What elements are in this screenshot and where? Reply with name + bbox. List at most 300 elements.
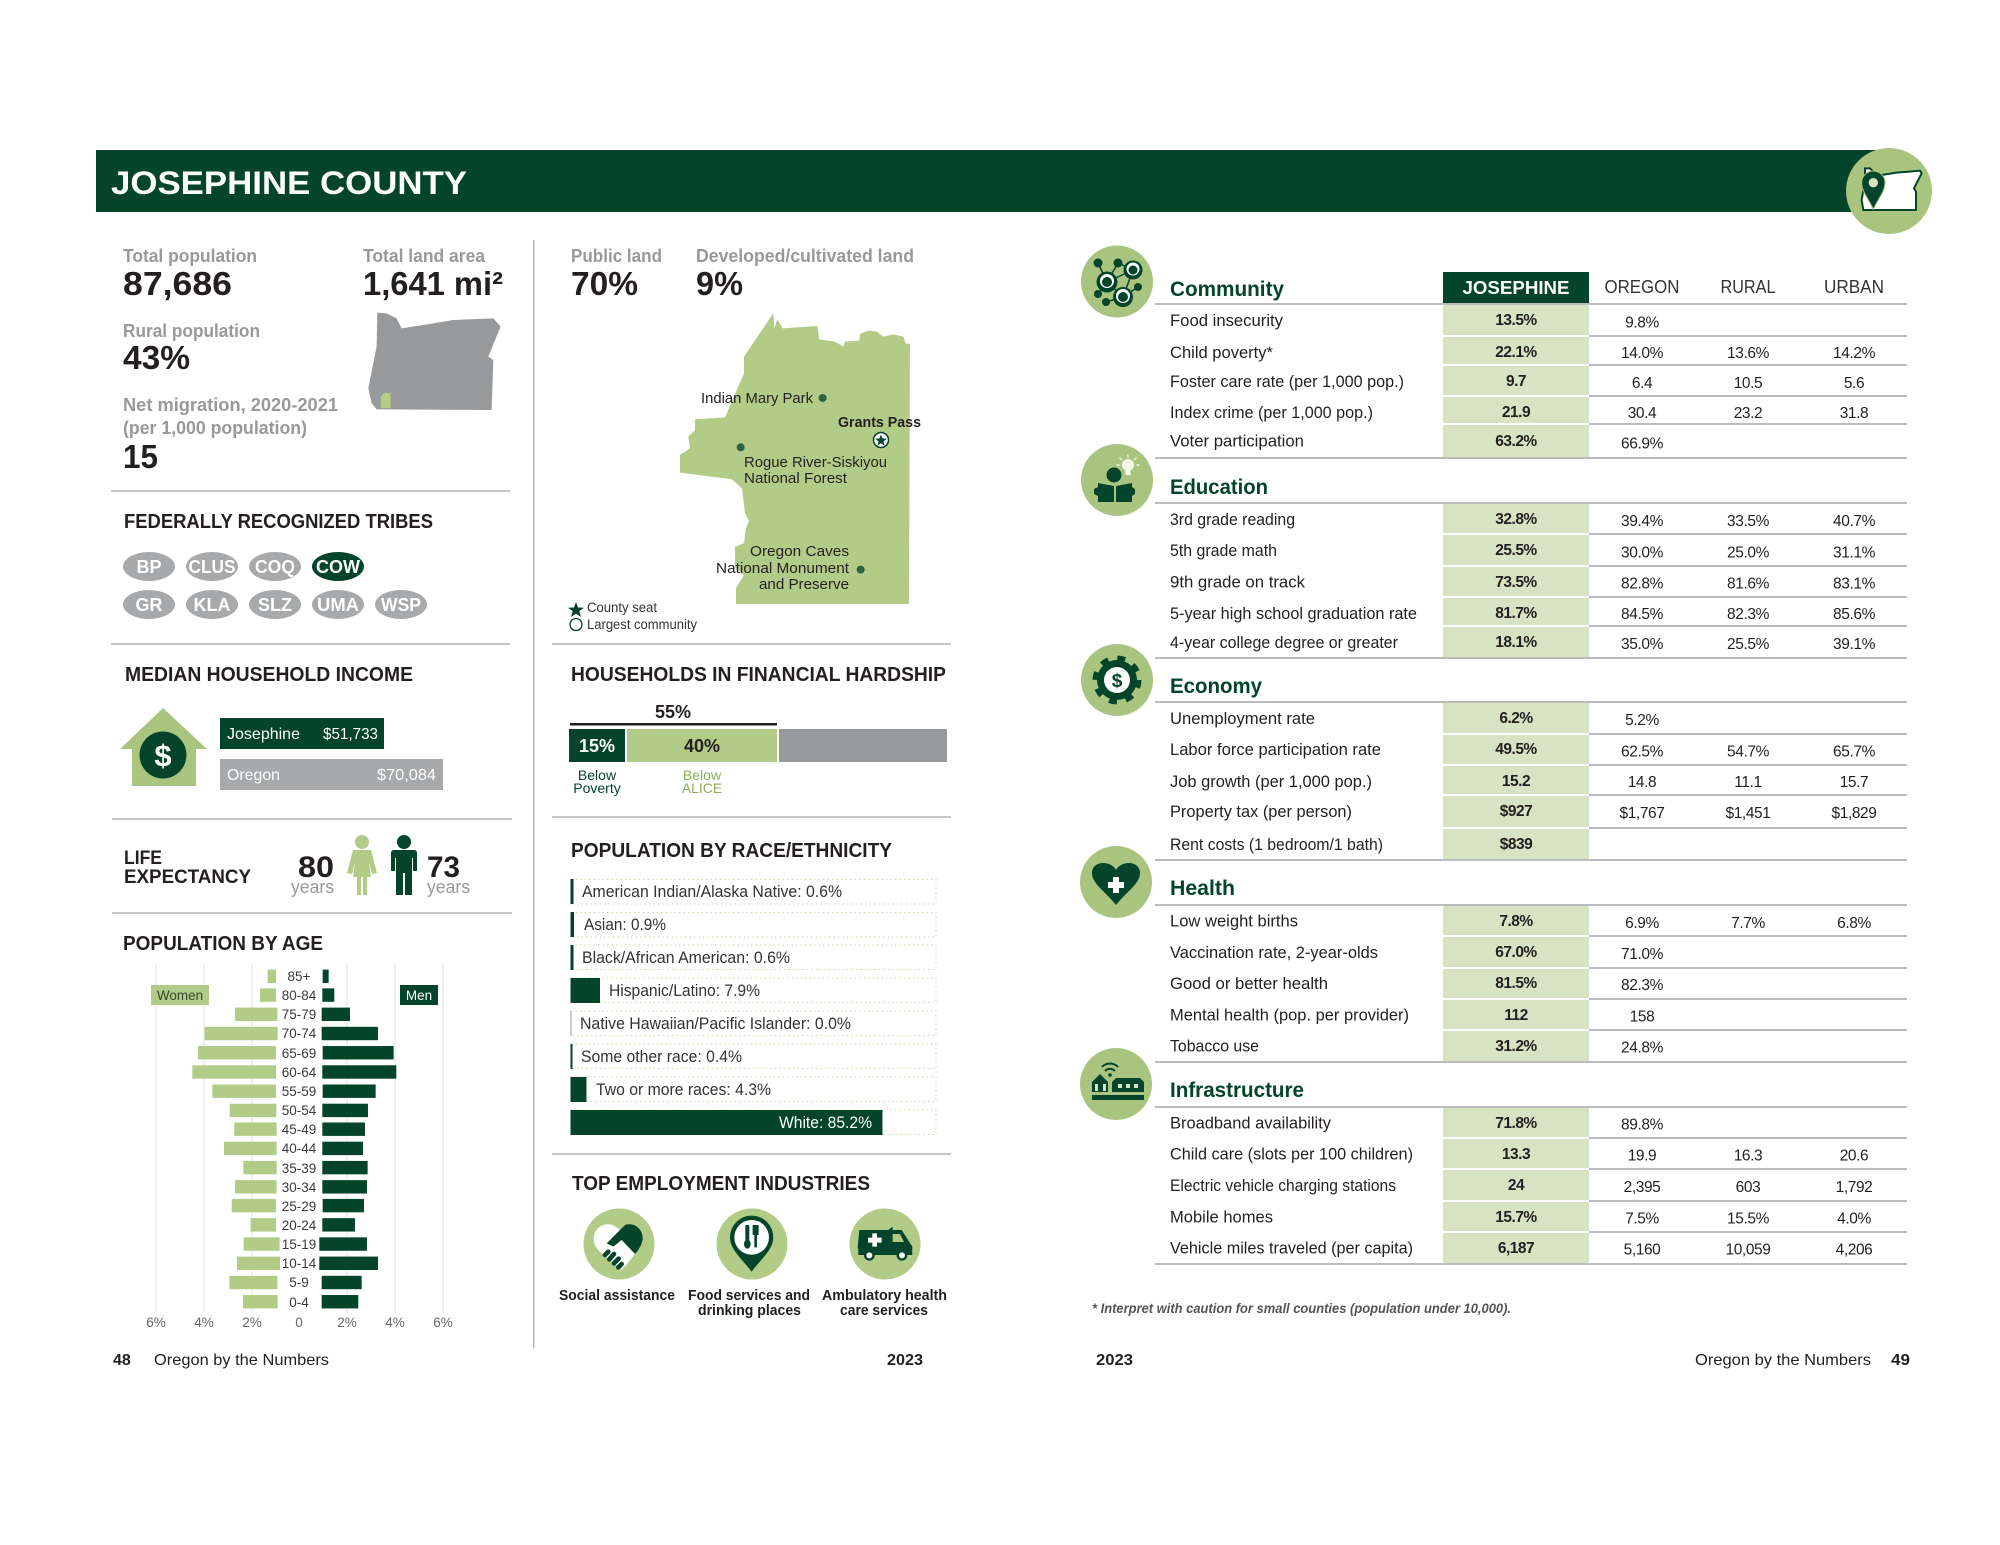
segment: below ALICE: ALICE bbox=[682, 780, 722, 796]
row: Unemployment rate: Unemployment rate bbox=[1170, 710, 1315, 728]
panel: median household income: MEDIAN HOUSEHOLD INCOME bbox=[125, 664, 413, 686]
row: Vehicle miles traveled: Vehicle miles traveled (per capita) bbox=[1170, 1240, 1413, 1258]
row: Asian bbox=[570, 912, 666, 937]
row: Good or better health: 81.5% bbox=[1495, 975, 1537, 992]
row: 9th grade on track bbox=[1170, 574, 1876, 592]
row: 5th grade math: 25.0% bbox=[1727, 544, 1770, 562]
row: White: White: 85.2% bbox=[779, 1113, 872, 1132]
row: Mobile homes: 15.5% bbox=[1727, 1210, 1770, 1228]
row: Index crime: 31.8 bbox=[1840, 405, 1868, 422]
icon: community network bbox=[1081, 246, 1153, 318]
row: Property tax bbox=[1170, 803, 1877, 822]
age group labels bbox=[282, 969, 317, 1310]
row: college degree: 35.0% bbox=[1621, 636, 1664, 653]
panel: life expectancy bbox=[124, 835, 470, 897]
row: Child poverty: 13.6% bbox=[1727, 345, 1770, 362]
footer: left page: 2023 bbox=[887, 1352, 923, 1369]
row: Vehicle miles traveled: 5,160 bbox=[1624, 1242, 1661, 1258]
row: EV charging stations: 24 bbox=[1508, 1177, 1525, 1194]
men life expectancy bbox=[427, 851, 470, 897]
stat: rural population bbox=[123, 321, 260, 376]
row: Job growth: 15.2 bbox=[1502, 773, 1530, 790]
section: Health bbox=[1080, 846, 1871, 1056]
footnote: * Interpret with caution for small counties (population under 10,000). bbox=[1092, 1300, 1511, 1316]
row: Mental health: 158 bbox=[1630, 1008, 1654, 1026]
row: Vaccination rate: 71.0% bbox=[1621, 946, 1664, 963]
map legend: County seat bbox=[587, 600, 657, 615]
page divider bbox=[533, 240, 534, 1348]
bar: Josephine income: $51,733 bbox=[323, 726, 378, 743]
row: Labor force participation: 62.5% bbox=[1621, 744, 1664, 760]
table header row bbox=[1443, 272, 1884, 303]
label: Rogue River-Siskiyou National Forest bbox=[744, 454, 887, 487]
row: White bbox=[570, 1110, 882, 1135]
age group labels: 10-14 bbox=[282, 1256, 317, 1271]
bar: Oregon income: Oregon bbox=[227, 767, 280, 784]
row: Mobile homes: 15.7% bbox=[1495, 1209, 1537, 1226]
heading: Community bbox=[1170, 278, 1284, 301]
row: 5th grade math bbox=[1170, 542, 1876, 562]
footer: left page: Oregon by the Numbers bbox=[154, 1352, 329, 1369]
segment: below poverty: 15% bbox=[579, 736, 615, 756]
row: Index crime: 21.9 bbox=[1502, 404, 1531, 421]
age group labels: 50-54 bbox=[282, 1103, 317, 1118]
row: Broadband availability bbox=[1170, 1114, 1664, 1134]
label: Indian Mary Park: Indian Mary Park bbox=[701, 390, 813, 407]
x axis labels: 4% bbox=[194, 1315, 214, 1330]
label: ambulatory health: care services bbox=[840, 1302, 928, 1319]
heading: Economy bbox=[1170, 675, 1262, 698]
row: Child care: 20.6 bbox=[1840, 1148, 1868, 1164]
row: Job growth: 11.1 bbox=[1734, 774, 1762, 791]
bar: Oregon income: $70,084 bbox=[377, 767, 436, 784]
label: Rogue River-Siskiyou National Forest: Rogue River-Siskiyou bbox=[744, 454, 887, 471]
row: Hispanic/Latino: Hispanic/Latino: 7.9% bbox=[609, 981, 760, 1000]
tribe badges: UMA bbox=[317, 595, 359, 615]
table header row: URBAN bbox=[1824, 277, 1884, 297]
row: 3rd grade reading: 39.4% bbox=[1621, 513, 1664, 530]
row: Tobacco use: 31.2% bbox=[1495, 1038, 1537, 1055]
row: Property tax: $927 bbox=[1500, 803, 1532, 820]
row: Property tax: $1,767 bbox=[1619, 805, 1665, 822]
stat: developed land: 9% bbox=[696, 265, 743, 302]
row: Labor force participation bbox=[1170, 741, 1876, 760]
stat: net migration: (per 1,000 population) bbox=[123, 418, 307, 438]
row: Native Hawaiian/Pacific Islander: Native Hawaiian/Pacific Islander: 0.0% bbox=[580, 1014, 851, 1033]
row: high school graduation: 85.6% bbox=[1833, 606, 1876, 623]
age group labels: 75-79 bbox=[282, 1007, 316, 1022]
stat: public land: Public land bbox=[571, 246, 662, 266]
row: Good or better health bbox=[1170, 975, 1664, 994]
row: Vaccination rate bbox=[1170, 944, 1664, 963]
title: JOSEPHINE COUNTY bbox=[111, 165, 467, 201]
segment: below ALICE: 40% bbox=[684, 736, 720, 756]
age group labels: 0-4 bbox=[289, 1295, 309, 1310]
row: college degree: 18.1% bbox=[1495, 634, 1537, 651]
row: Foster care rate: 10.5 bbox=[1734, 375, 1762, 392]
row: Vehicle miles traveled: 4,206 bbox=[1836, 1242, 1872, 1258]
row: Voter participation bbox=[1170, 432, 1664, 452]
row: college degree: 25.5% bbox=[1727, 636, 1770, 653]
segment: below poverty bbox=[569, 729, 625, 796]
row: Foster care rate: Foster care rate (per 1,000 pop.) bbox=[1170, 373, 1404, 391]
bars: men bbox=[319, 970, 396, 1308]
tribe badges: GR bbox=[136, 595, 163, 615]
stat: total population: 87,686 bbox=[123, 265, 232, 302]
section: Education bbox=[1081, 444, 1876, 653]
men life expectancy: 73 bbox=[427, 851, 460, 884]
heading: Infrastructure bbox=[1170, 1079, 1304, 1102]
label: Rogue River-Siskiyou National Forest: National Forest bbox=[744, 470, 848, 487]
header banner bbox=[96, 148, 1932, 234]
footer: right page bbox=[1096, 1352, 1910, 1369]
row: 9th grade on track: 83.1% bbox=[1833, 576, 1876, 592]
row: Asian: Asian: 0.9% bbox=[584, 915, 666, 934]
bracket: 55%: 55% bbox=[655, 702, 691, 722]
row: Child poverty: 14.2% bbox=[1833, 345, 1876, 362]
row: Vehicle miles traveled bbox=[1170, 1240, 1872, 1258]
panel: population by race/ethnicity bbox=[570, 840, 936, 1135]
row: Tobacco use bbox=[1170, 1038, 1664, 1056]
footer: left page: 48 bbox=[113, 1352, 131, 1369]
label: social assistance: Social assistance bbox=[559, 1287, 675, 1304]
row: EV charging stations bbox=[1170, 1177, 1872, 1196]
row: 5th grade math: 25.5% bbox=[1495, 542, 1537, 559]
row: Job growth bbox=[1170, 773, 1868, 791]
row: Child care: 16.3 bbox=[1734, 1148, 1762, 1164]
row: Voter participation: 66.9% bbox=[1621, 436, 1664, 452]
row: Child poverty: Child poverty* bbox=[1170, 344, 1274, 362]
label: Oregon Caves National Monument and Preserve: Oregon Caves bbox=[750, 543, 849, 560]
x axis labels: 6% bbox=[433, 1315, 453, 1330]
row: Food insecurity: Food insecurity bbox=[1170, 312, 1284, 330]
icon: man bbox=[391, 835, 417, 895]
label: Grants Pass: Grants Pass bbox=[838, 414, 921, 431]
label: Oregon Caves National Monument and Preserve: and Preserve bbox=[759, 576, 849, 593]
row: Index crime bbox=[1170, 404, 1868, 422]
footer: right page: 49 bbox=[1891, 1352, 1910, 1369]
row: 3rd grade reading: 3rd grade reading bbox=[1170, 511, 1295, 529]
row: Low weight births: Low weight births bbox=[1170, 912, 1298, 930]
row: Vaccination rate: Vaccination rate, 2-year-olds bbox=[1170, 944, 1378, 962]
age group labels: 30-34 bbox=[282, 1180, 317, 1195]
row: Index crime: Index crime (per 1,000 pop.) bbox=[1170, 404, 1373, 422]
bar: Josephine income bbox=[220, 718, 384, 749]
row: Property tax: $1,451 bbox=[1725, 805, 1771, 822]
row: high school graduation bbox=[1170, 605, 1876, 623]
stat: rural population: 43% bbox=[123, 339, 190, 376]
panel: median household income bbox=[120, 664, 443, 790]
row: EV charging stations: Electric vehicle charging stations bbox=[1170, 1177, 1396, 1195]
bars: women bbox=[192, 970, 280, 1308]
row: 5th grade math: 5th grade math bbox=[1170, 542, 1277, 560]
row: Mobile homes: 7.5% bbox=[1625, 1210, 1659, 1228]
panel: land use bbox=[571, 246, 914, 302]
age group labels: 70-74 bbox=[282, 1026, 317, 1041]
row: Rent costs: $839 bbox=[1500, 836, 1533, 853]
row: Labor force participation: Labor force participation rate bbox=[1170, 741, 1381, 759]
row: Foster care rate: 5.6 bbox=[1844, 375, 1864, 392]
women life expectancy: 80 bbox=[298, 851, 334, 884]
stat: net migration: 15 bbox=[123, 438, 158, 475]
row: Property tax: $1,829 bbox=[1831, 805, 1877, 822]
row: high school graduation: 82.3% bbox=[1727, 606, 1770, 623]
row: 3rd grade reading: 40.7% bbox=[1833, 513, 1876, 530]
row: Two or more races: Two or more races: 4.3% bbox=[596, 1080, 771, 1099]
stat: total population: Total population bbox=[123, 246, 257, 266]
row: Unemployment rate: 5.2% bbox=[1625, 712, 1659, 729]
tribe badges: COQ bbox=[255, 557, 295, 577]
panel: life expectancy: EXPECTANCY bbox=[124, 867, 251, 888]
row: EV charging stations: 2,395 bbox=[1624, 1179, 1660, 1196]
row: American Indian/Alaska Native: American Indian/Alaska Native: 0.6% bbox=[582, 882, 842, 901]
row: Child care: 13.3 bbox=[1502, 1146, 1531, 1163]
segment: below poverty: Below bbox=[578, 767, 617, 783]
age group labels: 85+ bbox=[288, 969, 311, 984]
row: Job growth: 15.7 bbox=[1840, 774, 1868, 791]
x axis labels bbox=[146, 1315, 453, 1330]
row: college degree: 4-year college degree or greater bbox=[1170, 634, 1398, 652]
map: Josephine County bbox=[568, 313, 921, 632]
tribe badges: COW bbox=[316, 557, 360, 577]
panel: federally recognized tribes: FEDERALLY RECOGNIZED TRIBES bbox=[124, 511, 433, 533]
row: Child care bbox=[1170, 1146, 1868, 1164]
stat: total population bbox=[123, 246, 257, 302]
tribe badges: SLZ bbox=[258, 595, 292, 615]
row: Good or better health: Good or better health bbox=[1170, 975, 1328, 993]
tribe badges: KLA bbox=[194, 595, 230, 615]
label: Oregon Caves National Monument and Preserve bbox=[716, 543, 850, 593]
icon: ambulance bbox=[850, 1208, 920, 1280]
men life expectancy: years bbox=[427, 877, 470, 897]
row: 5th grade math: 30.0% bbox=[1621, 544, 1664, 562]
stat: public land: 70% bbox=[571, 265, 638, 302]
section: Community bbox=[1081, 246, 1876, 452]
row: Low weight births: 7.7% bbox=[1731, 915, 1765, 932]
row: American Indian/Alaska Native bbox=[570, 879, 842, 904]
row: Child poverty: 14.0% bbox=[1621, 345, 1664, 362]
row: Job growth: 14.8 bbox=[1628, 774, 1656, 791]
row: Foster care rate: 6.4 bbox=[1632, 375, 1653, 392]
row: Broadband availability: Broadband availability bbox=[1170, 1114, 1332, 1132]
icon: social assistance handshake bbox=[584, 1208, 654, 1280]
row: Child care: 19.9 bbox=[1628, 1148, 1656, 1164]
row: 5th grade math: 31.1% bbox=[1833, 544, 1876, 562]
stat: net migration: Net migration, 2020-2021 bbox=[123, 395, 338, 415]
label: food services: Food services and bbox=[688, 1287, 810, 1304]
row: Labor force participation: 65.7% bbox=[1833, 744, 1876, 760]
panel: population by age: POPULATION BY AGE bbox=[123, 933, 323, 955]
tribe badges bbox=[123, 552, 427, 619]
row: Low weight births: 6.9% bbox=[1625, 915, 1659, 932]
bar: Oregon income bbox=[220, 759, 443, 790]
stat: net migration bbox=[123, 395, 338, 475]
row: Mental health: Mental health (pop. per provider) bbox=[1170, 1006, 1409, 1024]
age group labels: 60-64 bbox=[282, 1065, 317, 1080]
row: Property tax: Property tax (per person) bbox=[1170, 803, 1352, 821]
row: Low weight births: 6.8% bbox=[1837, 915, 1871, 932]
panel: life expectancy: LIFE bbox=[124, 848, 162, 869]
footer: right page: Oregon by the Numbers bbox=[1695, 1352, 1871, 1369]
label: food services bbox=[688, 1287, 810, 1319]
row: high school graduation: 84.5% bbox=[1621, 606, 1664, 623]
icon: gear with dollar: $ bbox=[1112, 671, 1123, 692]
panel: population by age bbox=[123, 933, 453, 1330]
row: Mobile homes: 4.0% bbox=[1837, 1210, 1871, 1228]
label: Oregon Caves National Monument and Preserve: National Monument bbox=[716, 560, 850, 577]
x axis labels: 4% bbox=[385, 1315, 405, 1330]
row: Mobile homes bbox=[1170, 1208, 1871, 1228]
label: Grants Pass bbox=[838, 414, 921, 448]
row: Black/African American: Black/African American: 0.6% bbox=[582, 948, 790, 967]
table header row: OREGON bbox=[1604, 277, 1680, 297]
row: 9th grade on track: 73.5% bbox=[1495, 574, 1537, 591]
age group labels: 25-29 bbox=[282, 1199, 316, 1214]
segment: below ALICE: Below bbox=[683, 767, 722, 783]
row: 3rd grade reading: 32.8% bbox=[1495, 511, 1537, 528]
panel: top employment industries bbox=[559, 1173, 947, 1319]
stat: public land bbox=[571, 246, 662, 302]
row: Unemployment rate: 6.2% bbox=[1499, 710, 1533, 727]
row: Child care: Child care (slots per 100 children) bbox=[1170, 1146, 1413, 1164]
icon: house with dollar bbox=[120, 708, 207, 786]
stat: developed land bbox=[696, 246, 914, 302]
stat: rural population: Rural population bbox=[123, 321, 260, 341]
map legend: Largest community bbox=[587, 617, 697, 632]
legend: men: Men bbox=[406, 988, 432, 1003]
row: Index crime: 30.4 bbox=[1628, 405, 1657, 422]
panel: households in financial hardship bbox=[569, 664, 947, 796]
bar: Josephine income: Josephine bbox=[227, 726, 300, 743]
icon: Oregon map with pin bbox=[1846, 148, 1932, 234]
row: Labor force participation: 49.5% bbox=[1495, 741, 1537, 758]
age group labels: 65-69 bbox=[282, 1046, 316, 1061]
age group labels: 55-59 bbox=[282, 1084, 316, 1099]
row: high school graduation: 81.7% bbox=[1495, 605, 1537, 622]
age group labels: 20-24 bbox=[282, 1218, 317, 1233]
map: Oregon with county highlighted bbox=[368, 313, 501, 410]
row: Mental health bbox=[1170, 1006, 1654, 1026]
women life expectancy bbox=[291, 851, 334, 897]
stat: total land area: Total land area bbox=[363, 246, 486, 266]
table header row: RURAL bbox=[1720, 277, 1776, 297]
row: Food insecurity bbox=[1170, 312, 1659, 332]
row: Black/African American bbox=[570, 945, 790, 970]
row: Tobacco use: Tobacco use bbox=[1170, 1038, 1259, 1056]
panel: federally recognized tribes bbox=[123, 511, 433, 619]
row: Food insecurity: 13.5% bbox=[1495, 312, 1537, 329]
row: Rent costs bbox=[1170, 836, 1533, 854]
Josephine column cells bbox=[1443, 305, 1589, 1263]
heading: Health bbox=[1170, 877, 1235, 900]
tribe badges: WSP bbox=[381, 595, 421, 615]
segment: remainder bbox=[779, 729, 947, 762]
map legend bbox=[568, 600, 697, 632]
row: Index crime: 23.2 bbox=[1734, 405, 1762, 422]
section: Economy bbox=[1081, 644, 1877, 854]
panel: population by race/ethnicity: POPULATION BY RACE/ETHNICITY bbox=[571, 840, 893, 862]
row: Low weight births: 7.8% bbox=[1499, 913, 1533, 930]
row: 9th grade on track: 82.8% bbox=[1621, 576, 1664, 592]
label: ambulatory health bbox=[822, 1287, 947, 1319]
icon: reader with lightbulb bbox=[1081, 444, 1153, 516]
label: food services: drinking places bbox=[698, 1302, 801, 1319]
icon: gear with dollar bbox=[1081, 644, 1153, 716]
row: Vaccination rate: 67.0% bbox=[1495, 944, 1537, 961]
icon: food services pin bbox=[716, 1208, 788, 1280]
row: college degree: 39.1% bbox=[1833, 636, 1876, 653]
x axis labels: 2% bbox=[337, 1315, 357, 1330]
row: Low weight births bbox=[1170, 912, 1871, 932]
x axis labels: 0 bbox=[295, 1315, 303, 1330]
row: Hispanic/Latino bbox=[570, 978, 760, 1003]
row: 3rd grade reading: 33.5% bbox=[1727, 513, 1770, 530]
row: Voter participation: 63.2% bbox=[1495, 433, 1537, 450]
section: Infrastructure bbox=[1080, 1048, 1872, 1258]
row: 3rd grade reading bbox=[1170, 511, 1876, 530]
row: Child poverty: 22.1% bbox=[1495, 344, 1537, 361]
x axis labels: 6% bbox=[146, 1315, 166, 1330]
icon: connected buildings bbox=[1080, 1048, 1152, 1120]
row: Child poverty bbox=[1170, 344, 1876, 362]
icon: heart with cross bbox=[1080, 846, 1152, 918]
row: Broadband availability: 71.8% bbox=[1495, 1115, 1537, 1132]
row: Voter participation: Voter participation bbox=[1170, 432, 1304, 450]
age group labels: 35-39 bbox=[282, 1161, 316, 1176]
footer: right page: 2023 bbox=[1096, 1352, 1133, 1369]
row: Two or more races bbox=[570, 1077, 771, 1102]
x axis labels: 2% bbox=[242, 1315, 262, 1330]
row: Mobile homes: Mobile homes bbox=[1170, 1208, 1273, 1226]
legend: women bbox=[151, 985, 209, 1005]
icon: house with dollar: $ bbox=[154, 738, 172, 773]
row: Vehicle miles traveled: 6,187 bbox=[1498, 1240, 1534, 1257]
panel: households in financial hardship: HOUSEHOLDS IN FINANCIAL HARDSHIP bbox=[571, 664, 946, 686]
stat: total land area: 1,641 mi² bbox=[363, 265, 503, 302]
women life expectancy: years bbox=[291, 877, 334, 897]
row: Mental health: 112 bbox=[1504, 1007, 1528, 1024]
row: Foster care rate bbox=[1170, 373, 1864, 392]
segment: below ALICE bbox=[627, 729, 777, 796]
age group labels: 5-9 bbox=[289, 1275, 309, 1290]
row: Some other race: Some other race: 0.4% bbox=[581, 1047, 742, 1066]
row: high school graduation: 5-year high school graduation rate bbox=[1170, 605, 1417, 623]
segment: below poverty: Poverty bbox=[573, 780, 621, 796]
row: Rent costs: Rent costs (1 bedroom/1 bath) bbox=[1170, 836, 1383, 854]
row: Vehicle miles traveled: 10,059 bbox=[1725, 1242, 1771, 1258]
row: Job growth: Job growth (per 1,000 pop.) bbox=[1170, 773, 1372, 791]
row: Tobacco use: 24.8% bbox=[1621, 1040, 1664, 1056]
tribe badges: BP bbox=[136, 557, 162, 577]
table rules bbox=[1155, 303, 1907, 1265]
tribe badges: CLUS bbox=[188, 557, 236, 577]
row: Food insecurity: 9.8% bbox=[1625, 314, 1659, 332]
row: college degree bbox=[1170, 634, 1876, 653]
stat: total land area bbox=[363, 246, 503, 302]
stat: developed land: Developed/cultivated land bbox=[696, 246, 914, 266]
row: Unemployment rate bbox=[1170, 710, 1659, 729]
row: Broadband availability: 89.8% bbox=[1621, 1116, 1664, 1134]
row: 9th grade on track: 81.6% bbox=[1727, 576, 1770, 592]
age group labels: 40-44 bbox=[282, 1141, 317, 1156]
panel: county statistics bbox=[123, 246, 503, 475]
row: Foster care rate: 9.7 bbox=[1506, 373, 1526, 390]
heading: Education bbox=[1170, 476, 1268, 499]
panel: top employment industries: TOP EMPLOYMENT INDUSTRIES bbox=[572, 1173, 870, 1195]
row: EV charging stations: 1,792 bbox=[1836, 1179, 1872, 1196]
legend: women: Women bbox=[157, 988, 203, 1003]
table header row: JOSEPHINE bbox=[1462, 278, 1570, 298]
